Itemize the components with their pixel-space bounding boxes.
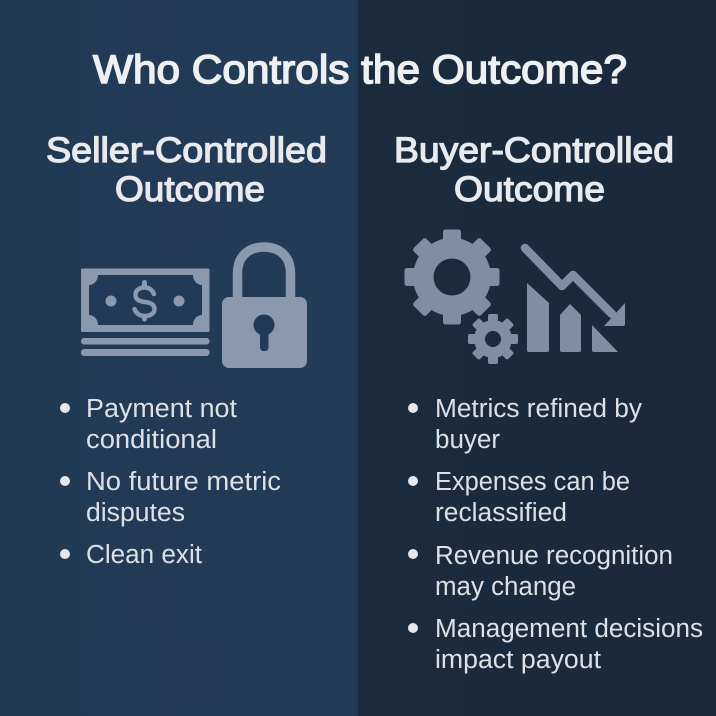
icon: small gear [468, 314, 518, 364]
bullet: clean exit: Clean exit [86, 541, 202, 569]
bullet: no future metric disputes: No future metric [86, 468, 281, 496]
bullet: payment not conditional [60, 395, 237, 454]
bullet: expenses can be reclassified: Expenses can be [435, 468, 630, 496]
heading: buyer-controlled outcome: Outcome [454, 169, 605, 209]
bullet: revenue recognition may change: Revenue recognition [435, 542, 673, 570]
bullet list: seller [60, 395, 281, 569]
bullet: payment not conditional: Payment not [86, 395, 237, 423]
icon: padlock [222, 247, 307, 368]
bullet: expenses can be reclassified [408, 468, 630, 527]
bullet: revenue recognition may change: may change [435, 573, 576, 601]
bullet: no future metric disputes [60, 468, 281, 527]
heading: seller-controlled outcome: Seller-Controlled [46, 130, 327, 170]
panel: buyer-controlled column [394, 130, 703, 674]
title: Who Controls the Outcome? [93, 48, 627, 92]
panel: buyer background [358, 0, 716, 716]
bullet: revenue recognition may change [408, 542, 673, 601]
bullet: metrics refined by buyer: Metrics refined by [435, 395, 642, 423]
bullet: management decisions impact payout: impact payout [435, 646, 601, 674]
bullet: management decisions impact payout: Management decisions [435, 615, 703, 643]
bullet list: buyer [408, 395, 703, 674]
bullet: management decisions impact payout [408, 615, 703, 674]
bullet: payment not conditional: conditional [86, 426, 217, 454]
bullet: metrics refined by buyer [408, 395, 642, 454]
bullet: expenses can be reclassified: reclassified [435, 499, 567, 527]
panel: seller background [0, 0, 358, 716]
heading: seller-controlled outcome [46, 130, 327, 209]
panel: seller-controlled column [46, 130, 327, 569]
heading: seller-controlled outcome: Outcome [115, 169, 265, 209]
icon: large gear [404, 230, 500, 324]
icon: declining bar chart with arrow [525, 248, 625, 352]
bullet: metrics refined by buyer: buyer [435, 426, 501, 454]
heading: buyer-controlled outcome [394, 130, 674, 209]
bullet: no future metric disputes: disputes [86, 499, 185, 527]
heading: buyer-controlled outcome: Buyer-Controlled [394, 130, 674, 170]
icon: money stack [81, 268, 210, 356]
